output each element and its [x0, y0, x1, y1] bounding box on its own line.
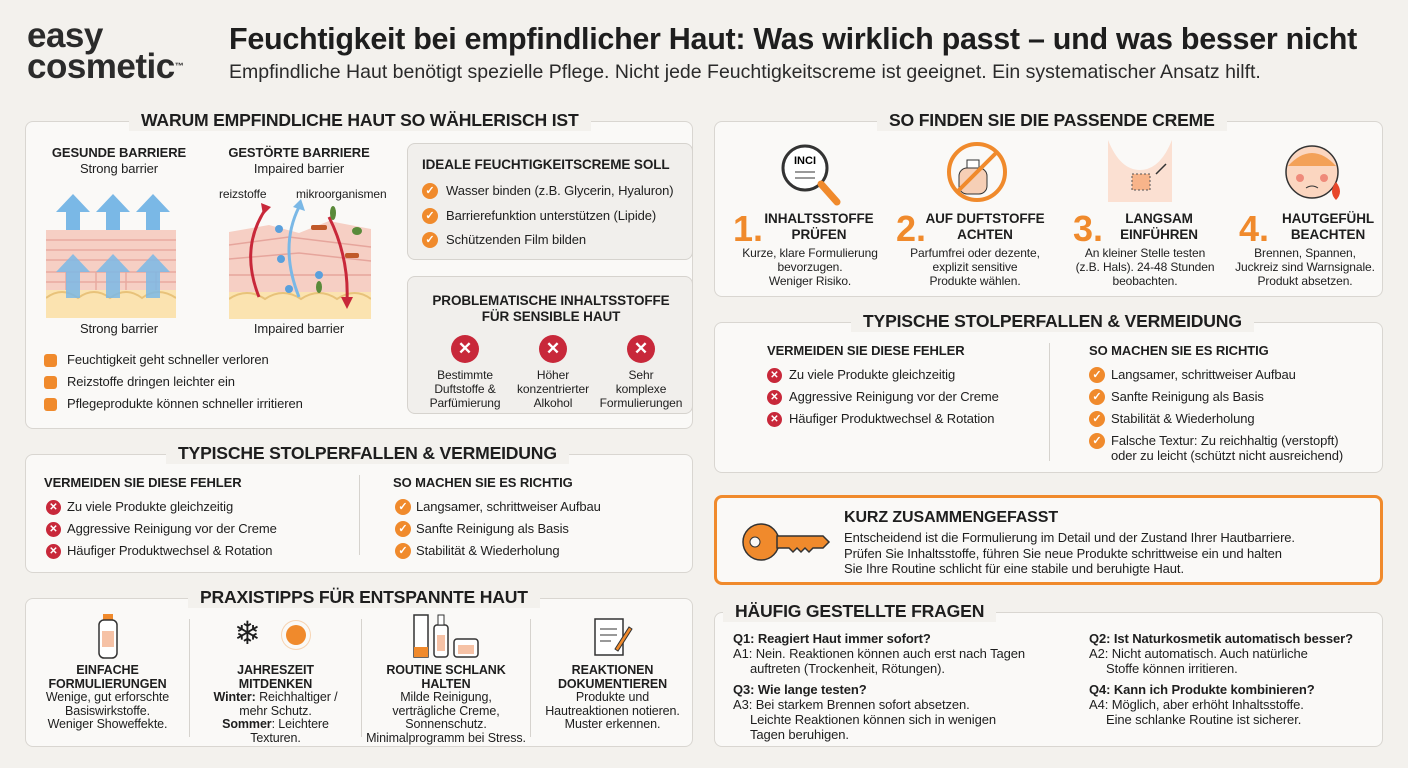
subtitle: Empfindliche Haut benötigt spezielle Pflege. Nicht jede Feuchtigkeitscreme ist geeignet. Ein systematischer Ansatz hilft.	[229, 61, 1261, 83]
tip 2	[213, 615, 338, 744]
faq left: Leichte Reaktionen können sich in wenigen	[750, 712, 996, 727]
panel: stolperfallen right	[714, 322, 1383, 473]
panel: so finden sie die passende creme	[714, 121, 1383, 297]
box: problematische inhaltsstoffe: PROBLEMATISCHE INHALTSSTOFFE	[432, 293, 670, 308]
column: richtig: ✓	[1092, 391, 1102, 403]
column: fehler: ✕	[770, 370, 779, 381]
tip 3: Minimalprogramm bei Stress.	[366, 730, 526, 744]
box: problematische inhaltsstoffe: Duftstoffe &	[434, 382, 496, 396]
caption strong: Strong barrier	[80, 321, 158, 336]
column: richtig: Langsamer, schrittweiser Aufbau	[416, 499, 601, 514]
step 1	[733, 144, 878, 288]
heading: WARUM EMPFINDLICHE HAUT SO WÄHLERISCH IST	[141, 110, 578, 130]
faq right: Q2: Ist Naturkosmetik automatisch besser?	[1089, 631, 1353, 646]
logo: easy	[27, 16, 103, 55]
column: richtig	[1089, 343, 1343, 463]
tip 4: DOKUMENTIEREN	[558, 677, 667, 691]
tip 3: Sonnenschutz.	[405, 717, 487, 731]
faq left: Q3: Wie lange testen?	[733, 682, 867, 697]
column: fehler: ✕	[770, 392, 779, 403]
step 1: bevorzugen.	[778, 260, 842, 274]
column: richtig: oder zu leicht (schützt nicht ausreichend)	[1111, 448, 1343, 463]
step 2: ACHTEN	[957, 227, 1013, 242]
bullet list: Feuchtigkeit geht schneller verloren	[67, 352, 269, 367]
tip 1: EINFACHE	[76, 663, 139, 677]
faq left: A1: Nein. Reaktionen können auch erst nach Tagen	[733, 646, 1025, 661]
column: fehler: ✕	[770, 414, 779, 425]
step 3: 3.	[1073, 208, 1103, 249]
faq left: Tagen beruhigen.	[750, 727, 849, 742]
step 3: EINFÜHREN	[1120, 227, 1198, 242]
tip 2: JAHRESZEIT	[237, 663, 314, 677]
tip 1: Weniger Showeffekte.	[48, 717, 167, 731]
column: richtig: ✓	[398, 545, 408, 557]
text: TYPISCHE STOLPERFALLEN & VERMEIDUNG	[178, 443, 557, 463]
step 4: Produkt absetzen.	[1257, 274, 1353, 288]
faq right: Q4: Kann ich Produkte kombinieren?	[1089, 682, 1315, 697]
column: fehler	[44, 475, 277, 559]
step 1: PRÜFEN	[792, 227, 846, 242]
column: fehler: ✕	[49, 546, 58, 557]
box: ideale feuchtigkeitscreme: ✓	[425, 210, 435, 222]
column: fehler: Aggressive Reinigung vor der Creme	[789, 389, 999, 404]
tip 1: FORMULIERUNGEN	[48, 677, 167, 691]
tip 2: Winter: Reichhaltiger /	[213, 690, 338, 704]
box: problematische inhaltsstoffe: ✕	[634, 339, 648, 358]
tip 4: Hautreaktionen notieren.	[545, 704, 680, 718]
tip 2: ❄	[234, 615, 261, 651]
tip 4: Muster erkennen.	[565, 717, 660, 731]
column: richtig: Sanfte Reinigung als Basis	[416, 521, 569, 536]
column: fehler: ✕	[49, 524, 58, 535]
tip 4: Produkte und	[576, 690, 649, 704]
caption impaired: Impaired barrier	[254, 321, 344, 336]
column: fehler: Häufiger Produktwechsel & Rotation	[789, 411, 994, 426]
step 2	[896, 142, 1045, 288]
faq left: Q1: Reagiert Haut immer sofort?	[733, 631, 931, 646]
faq right	[1089, 631, 1353, 727]
step 4: HAUTGEFÜHL	[1282, 211, 1374, 226]
tip 3: Milde Reinigung,	[400, 690, 492, 704]
column: richtig: ✓	[1092, 435, 1102, 447]
box: problematische inhaltsstoffe: ✕	[546, 339, 560, 358]
faq left: auftreten (Trockenheit, Rötungen).	[750, 661, 945, 676]
tip 3	[366, 614, 526, 744]
box: problematische inhaltsstoffe: ✕	[458, 339, 472, 358]
column: fehler: VERMEIDEN SIE DIESE FEHLER	[44, 475, 242, 490]
faq right: Stoffe können irritieren.	[1106, 661, 1238, 676]
bullet list	[44, 352, 303, 411]
callout: kurz zusammengefasst: Sie Ihre Routine schlicht für eine stabile und beruhigte Haut.	[844, 561, 1184, 576]
skin illustration impaired	[229, 199, 371, 319]
panel: stolperfallen left	[25, 454, 693, 573]
column: richtig: ✓	[398, 523, 408, 535]
faq right: A2: Nicht automatisch. Auch natürliche	[1089, 646, 1308, 661]
bullet list: Pflegeprodukte können schneller irritieren	[67, 396, 303, 411]
title: Feuchtigkeit bei empfindlicher Haut: Was wirklich passt – und was besser nicht	[229, 22, 1357, 56]
box: problematische inhaltsstoffe: Bestimmte	[437, 368, 493, 382]
tip 4	[545, 618, 680, 731]
step 4	[1235, 145, 1375, 288]
column: fehler: VERMEIDEN SIE DIESE FEHLER	[767, 343, 964, 358]
tip 3: ROUTINE SCHLANK	[386, 663, 506, 677]
column: richtig: Langsamer, schrittweiser Aufbau	[1111, 367, 1296, 382]
logo: cosmetic™	[27, 47, 183, 86]
tip 4: REAKTIONEN	[572, 663, 653, 677]
callout: kurz zusammengefasst: Prüfen Sie Inhaltsstoffe, führen Sie neue Produkte schrittweise ein und halten	[844, 546, 1282, 560]
text: TYPISCHE STOLPERFALLEN & VERMEIDUNG	[863, 311, 1242, 331]
step 1: 1.	[733, 208, 763, 249]
panel: warum empfindliche haut: Impaired barrier	[254, 161, 344, 176]
box: problematische inhaltsstoffe	[407, 276, 693, 414]
column: fehler: Zu viele Produkte gleichzeitig	[789, 367, 955, 382]
skin illustration healthy	[46, 194, 176, 318]
panel: warum empfindliche haut	[25, 121, 693, 429]
panel: faq	[714, 612, 1383, 747]
tip 1	[46, 614, 169, 731]
box: ideale feuchtigkeitscreme: Barrierefunktion unterstützen (Lipide)	[446, 208, 656, 223]
box: problematische inhaltsstoffe: Formulierungen	[600, 396, 682, 410]
column: fehler: ✕	[49, 502, 58, 513]
box: ideale feuchtigkeitscreme: ✓	[425, 234, 435, 246]
box: problematische inhaltsstoffe: Alkohol	[534, 396, 572, 410]
panel: warum empfindliche haut: Strong barrier	[80, 161, 158, 176]
step 1: Kurze, klare Formulierung	[742, 246, 878, 260]
step 4: BEACHTEN	[1291, 227, 1365, 242]
step 1: INCI	[794, 155, 816, 167]
column: fehler: Aggressive Reinigung vor der Creme	[67, 521, 277, 536]
text: HÄUFIG GESTELLTE FRAGEN	[735, 601, 984, 621]
faq left	[733, 631, 1025, 742]
tip 1: Basiswirkstoffe.	[65, 704, 150, 718]
column: fehler	[767, 343, 999, 427]
step 3: An kleiner Stelle testen	[1085, 246, 1205, 260]
text: SO FINDEN SIE DIE PASSENDE CREME	[889, 110, 1215, 130]
step 4: 4.	[1239, 208, 1269, 249]
column: richtig: SO MACHEN SIE ES RICHTIG	[1089, 343, 1269, 358]
box: ideale feuchtigkeitscreme: ✓	[425, 185, 435, 197]
tip 2: Texturen.	[250, 730, 301, 744]
callout: kurz zusammengefasst	[714, 495, 1383, 585]
box: problematische inhaltsstoffe: Sehr	[629, 368, 653, 382]
box: problematische inhaltsstoffe: Parfümierung	[430, 396, 500, 410]
box: ideale feuchtigkeitscreme: Schützenden Film bilden	[446, 232, 586, 247]
column: richtig: ✓	[1092, 369, 1102, 381]
panel: warum empfindliche haut: reizstoffe	[219, 187, 266, 201]
step 4: Juckreiz sind Warnsignale.	[1235, 260, 1375, 274]
column: richtig: Stabilität & Wiederholung	[416, 543, 559, 558]
box: problematische inhaltsstoffe: Höher	[537, 368, 569, 382]
column: richtig: SO MACHEN SIE ES RICHTIG	[393, 475, 573, 490]
tip 3: HALTEN	[421, 677, 471, 691]
step 1: INHALTSSTOFFE	[764, 211, 874, 226]
step 3	[1073, 140, 1214, 288]
faq right: Eine schlanke Routine ist sicherer.	[1106, 712, 1301, 727]
column: fehler: Häufiger Produktwechsel & Rotation	[67, 543, 272, 558]
tip 2: MITDENKEN	[239, 677, 312, 691]
label: gestörte barriere: GESTÖRTE BARRIERE	[228, 145, 370, 160]
box: problematische inhaltsstoffe: konzentrierter	[517, 382, 589, 396]
faq right: A4: Möglich, aber erhöht Inhaltsstoffe.	[1089, 697, 1304, 712]
panel: praxistipps	[25, 598, 693, 747]
step 3: beobachten.	[1113, 274, 1177, 288]
step 1: Weniger Risiko.	[769, 274, 851, 288]
icon: key	[742, 523, 830, 561]
step 2: AUF DUFTSTOFFE	[925, 211, 1045, 226]
faq left: A3: Bei starkem Brennen sofort absetzen.	[733, 697, 970, 712]
tip 2: mehr Schutz.	[239, 704, 312, 718]
box: ideale feuchtigkeitscreme: IDEALE FEUCHTIGKEITSCREME SOLL	[422, 157, 670, 172]
column: fehler: Zu viele Produkte gleichzeitig	[67, 499, 233, 514]
bullet list: Reizstoffe dringen leichter ein	[67, 374, 235, 389]
step 2: 2.	[896, 208, 926, 249]
panel: warum empfindliche haut: mikroorganismen	[296, 187, 387, 201]
callout: kurz zusammengefasst: Entscheidend ist die Formulierung im Detail und der Zustand Ihrer Hautbarriere.	[844, 530, 1295, 545]
column: richtig: ✓	[1092, 413, 1102, 425]
column: richtig: Sanfte Reinigung als Basis	[1111, 389, 1264, 404]
column: richtig: Falsche Textur: Zu reichhaltig (verstopft)	[1111, 433, 1338, 448]
label: gesunde barriere: GESUNDE BARRIERE	[52, 145, 186, 160]
box: ideale feuchtigkeitscreme: Wasser binden (z.B. Glycerin, Hyaluron)	[446, 183, 674, 198]
logo	[27, 16, 183, 86]
step 2: Produkte wählen.	[929, 274, 1021, 288]
callout: kurz zusammengefasst: KURZ ZUSAMMENGEFASST	[844, 509, 1058, 526]
box: problematische inhaltsstoffe: FÜR SENSIBLE HAUT	[482, 309, 620, 324]
step 2: explizit sensitive	[933, 260, 1017, 274]
column: richtig	[393, 475, 601, 559]
step 2: Parfumfrei oder dezente,	[910, 246, 1040, 260]
column: richtig: ✓	[398, 501, 408, 513]
box: problematische inhaltsstoffe: komplexe	[616, 382, 666, 396]
step 3: LANGSAM	[1125, 211, 1193, 226]
tip 1: Wenige, gut erforschte	[46, 690, 169, 704]
text: PRAXISTIPPS FÜR ENTSPANNTE HAUT	[200, 587, 528, 607]
step 4: Brennen, Spannen,	[1254, 246, 1356, 260]
step 3: (z.B. Hals). 24-48 Stunden	[1076, 260, 1214, 274]
column: richtig: Stabilität & Wiederholung	[1111, 411, 1254, 426]
box: ideale feuchtigkeitscreme	[407, 143, 693, 260]
tip 3: verträgliche Creme,	[392, 704, 500, 718]
tip 2: Sommer: Leichtere	[222, 717, 329, 731]
